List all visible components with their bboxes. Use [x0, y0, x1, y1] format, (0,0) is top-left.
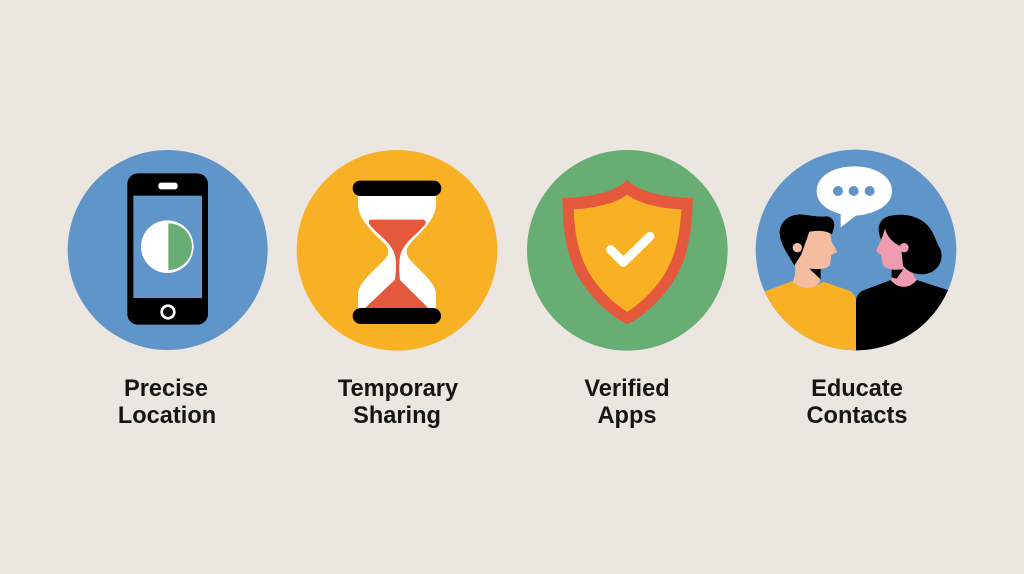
- label: Verified Apps: Apps: [598, 403, 656, 429]
- label: Verified Apps: [584, 376, 670, 429]
- woman's face: [876, 229, 903, 270]
- panel: educate contacts: [756, 150, 956, 429]
- panel: verified apps: [527, 150, 728, 429]
- label: Precise Location: Location: [118, 403, 216, 429]
- label: Verified Apps: Verified: [584, 376, 670, 402]
- label: Educate Contacts: [807, 376, 907, 429]
- label: Precise Location: Precise: [124, 376, 208, 402]
- man's neck: [793, 262, 820, 288]
- woman's neck: [891, 267, 917, 287]
- label: Educate Contacts: Contacts: [807, 403, 907, 429]
- label: Temporary Sharing: Temporary: [338, 376, 458, 402]
- panel: temporary sharing: [297, 150, 497, 429]
- woman's hair: [879, 215, 942, 274]
- icon: hourglass: [297, 150, 497, 351]
- label: Precise Location: [118, 376, 216, 429]
- label: Educate Contacts: Educate: [811, 376, 903, 402]
- man's head: [796, 230, 837, 269]
- icon: phone with location disc: [68, 150, 268, 350]
- label: Temporary Sharing: Sharing: [353, 403, 441, 429]
- woman's shirt: [856, 280, 953, 353]
- man's shirt: [759, 281, 856, 353]
- icon: shield with check: [527, 150, 728, 351]
- panel: precise location: [68, 150, 268, 429]
- speech bubble: [817, 166, 892, 227]
- label: Temporary Sharing: [338, 376, 458, 429]
- icon: two people talking: [756, 150, 956, 353]
